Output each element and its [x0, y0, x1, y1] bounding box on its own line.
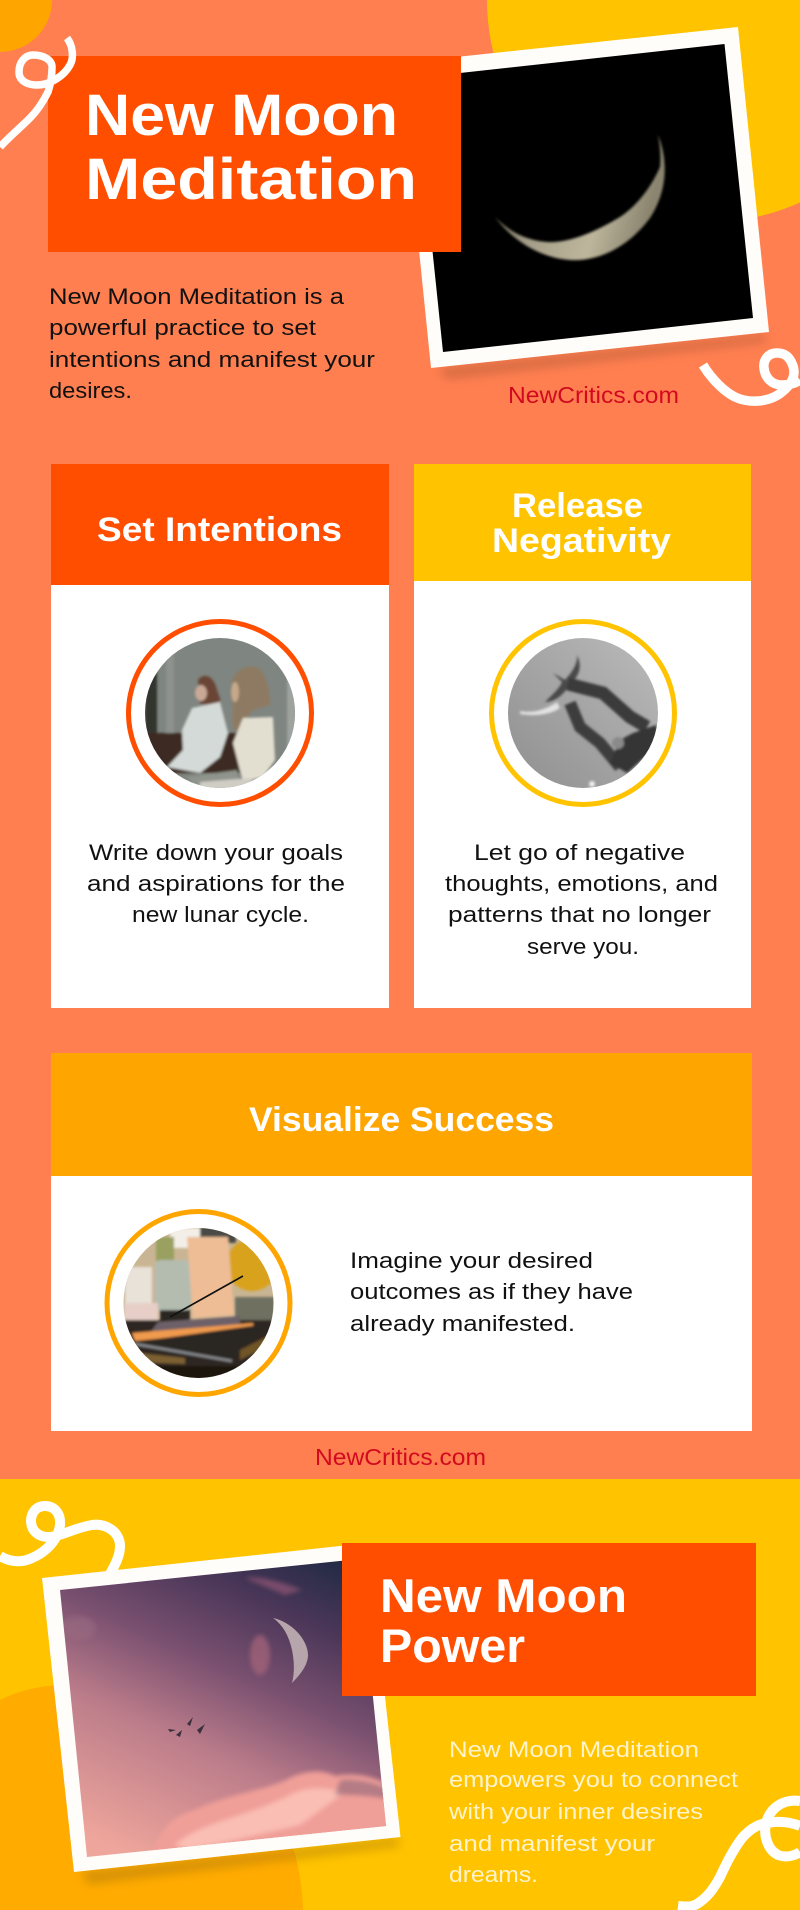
- bottom section background: [0, 1479, 800, 1910]
- photo: two women meditating: [145, 638, 295, 788]
- heading: Set Intentions: [97, 511, 342, 549]
- body text: [87, 840, 345, 927]
- title: Power: [380, 1619, 525, 1672]
- heading: Visualize Success: [249, 1101, 554, 1139]
- title box: new moon power: [342, 1543, 756, 1696]
- intro text: desires.: [49, 378, 132, 403]
- panel: set intentions: [51, 464, 389, 1008]
- heading: Release: [512, 487, 643, 525]
- photo: hands releasing a bird: [508, 638, 658, 788]
- body text: Imagine your desired: [350, 1248, 593, 1273]
- closing text: with your inner desires: [448, 1799, 703, 1824]
- body text: Let go of negative: [474, 840, 685, 865]
- icon ring: [107, 1212, 290, 1394]
- body text: serve you.: [527, 934, 639, 959]
- watermark: NewCritics.com: [508, 382, 679, 408]
- body text: thoughts, emotions, and: [445, 871, 718, 896]
- swirl: right of moon photo: [703, 353, 800, 401]
- body text: Write down your goals: [89, 840, 343, 865]
- body text: already manifested.: [350, 1311, 575, 1336]
- body text: new lunar cycle.: [132, 902, 309, 927]
- closing text: New Moon Meditation: [449, 1737, 699, 1762]
- icon ring: [128, 622, 312, 804]
- swirl: top left: [0, 38, 72, 147]
- blob: top right yellow: [487, 0, 800, 222]
- intro text: [49, 284, 375, 403]
- watermark: NewCritics.com: [315, 1444, 486, 1470]
- icon: birds: [168, 1717, 205, 1737]
- title: [85, 83, 417, 212]
- closing text: [448, 1737, 738, 1887]
- heading: Negativity: [492, 522, 671, 560]
- title: New Moon: [380, 1569, 627, 1622]
- closing text: empowers you to connect: [449, 1767, 738, 1792]
- blob: bottom left orange: [0, 1685, 303, 1910]
- photo: dusk sky with moon in white frame: [42, 1543, 400, 1884]
- icon: crescent moon: [273, 1618, 308, 1683]
- intro text: New Moon Meditation is a: [49, 284, 345, 309]
- panel: release negativity: [414, 464, 751, 1008]
- icon ring: [492, 622, 674, 804]
- swirl: bottom right: [678, 1801, 800, 1907]
- title: [380, 1569, 627, 1672]
- body text: [350, 1248, 633, 1336]
- title: New Moon: [85, 83, 398, 148]
- body text: and aspirations for the: [87, 871, 345, 896]
- intro text: intentions and manifest your: [49, 347, 375, 372]
- heading: [492, 487, 671, 560]
- swirl: bottom left: [0, 1506, 120, 1574]
- closing text: dreams.: [449, 1862, 538, 1887]
- icon: crescent moon: [495, 135, 665, 260]
- photo: crescent moon in white frame: [400, 27, 769, 379]
- title box: [48, 56, 461, 252]
- body text: outcomes as if they have: [350, 1279, 633, 1304]
- title: Meditation: [85, 147, 417, 212]
- blob: top left orange: [0, 0, 52, 52]
- intro text: powerful practice to set: [49, 315, 316, 340]
- body text: patterns that no longer: [448, 902, 711, 927]
- photo: incense on a table: [124, 1228, 274, 1378]
- panel: visualize success: [51, 1053, 752, 1431]
- body text: [445, 840, 718, 959]
- closing text: and manifest your: [449, 1831, 655, 1856]
